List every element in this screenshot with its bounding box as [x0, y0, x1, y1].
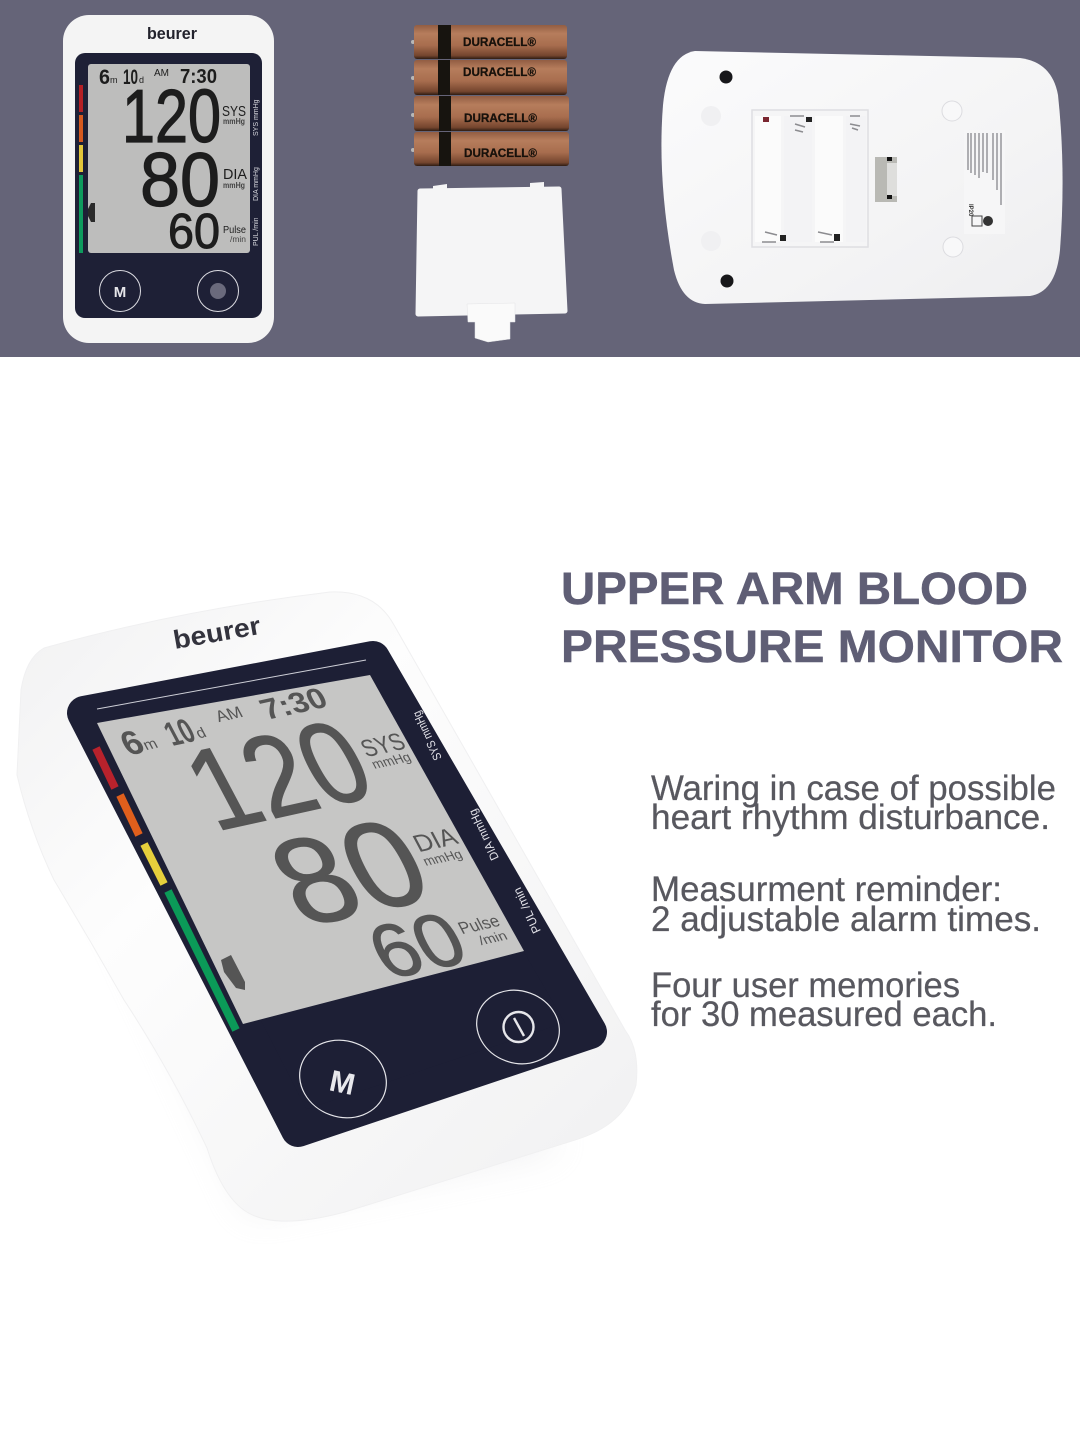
- dark front panel small: [75, 53, 262, 318]
- feature: measurement reminder: Measurment reminder:: [651, 870, 1002, 909]
- brand logo small: beurer: [147, 24, 197, 43]
- monitor back view: [661, 51, 1063, 304]
- AAA batteries: [411, 25, 569, 166]
- LCD readings small: 120: [122, 74, 221, 158]
- LCD readings large: mmHg: [369, 749, 413, 772]
- title: PRESSURE MONITOR: [561, 621, 1063, 672]
- LCD readings small: SYS: [222, 103, 246, 120]
- LCD readings small: /min: [230, 235, 246, 244]
- battery compartment: [752, 110, 868, 247]
- LCD readings small: mmHg: [223, 181, 245, 190]
- LCD readings small: d: [139, 75, 144, 85]
- power button small: [198, 270, 238, 312]
- LCD readings large: [113, 670, 526, 1023]
- LCD readings small: [99, 66, 247, 259]
- title: [561, 563, 1063, 672]
- battery 3: [411, 96, 569, 131]
- scale marker large: [221, 955, 245, 990]
- LCD screen large: [97, 675, 524, 1024]
- panel side labels small: DIA mmHg: [253, 167, 260, 201]
- LCD readings large: 6: [113, 723, 151, 763]
- LCD readings large: AM: [211, 702, 246, 726]
- battery 4: [411, 132, 569, 166]
- large monitor shadow: [60, 800, 560, 1215]
- top band background: [0, 0, 1080, 357]
- panel side labels small: PUL /min: [253, 217, 260, 246]
- power button large: [466, 979, 570, 1075]
- panel side labels small: [253, 99, 260, 246]
- M button small: [100, 270, 140, 312]
- small monitor front view: [63, 15, 274, 343]
- LCD readings large: DIA: [409, 824, 463, 858]
- feature: user memories: for 30 measured each.: [651, 995, 997, 1034]
- LCD readings large: 7:30: [254, 681, 333, 726]
- panel highlight line: [97, 660, 366, 709]
- feature: heart rhythm warning: [651, 769, 1056, 837]
- rating label: IP20: [967, 204, 973, 217]
- feature: user memories: [651, 966, 997, 1034]
- brand logo large: beurer: [171, 610, 263, 655]
- rating label: [964, 130, 1005, 234]
- LCD readings large: Pulse: [455, 911, 503, 938]
- LCD readings small: m: [110, 75, 118, 85]
- battery 1: DURACELL®: [463, 35, 536, 49]
- LCD readings small: 60: [168, 205, 220, 259]
- feature: measurement reminder: [651, 870, 1041, 939]
- LCD readings large: SYS: [356, 729, 410, 762]
- LCD readings small: 80: [140, 138, 220, 223]
- M button small: M: [114, 284, 126, 301]
- dark front panel large: [84, 658, 590, 1130]
- title: UPPER ARM BLOOD: [561, 563, 1028, 614]
- rubber feet: [720, 70, 734, 288]
- feature: heart rhythm warning: Waring in case of possible: [651, 769, 1056, 808]
- LCD readings large: d: [193, 725, 209, 742]
- device body: [17, 592, 637, 1221]
- battery 2: [411, 60, 567, 95]
- LCD readings small: 6: [99, 66, 110, 89]
- LCD readings large: /min: [475, 928, 510, 948]
- panel side labels large: PUL /min: [510, 885, 544, 936]
- battery 4: DURACELL®: [464, 146, 537, 160]
- LCD readings large: 10: [157, 711, 202, 753]
- feature: measurement reminder: 2 adjustable alarm times.: [651, 900, 1041, 939]
- LCD readings small: AM: [154, 68, 169, 79]
- LCD readings small: 7:30: [180, 66, 217, 88]
- colour scale large: [96, 748, 236, 1030]
- scale marker small: [88, 203, 95, 222]
- LCD readings large: 80: [247, 793, 452, 952]
- panel side labels large: [410, 709, 544, 936]
- LCD readings small: 10: [123, 66, 138, 89]
- colour scale small: [79, 85, 83, 253]
- M button large: M: [327, 1065, 358, 1102]
- LCD readings small: DIA: [223, 166, 247, 183]
- feature: user memories: Four user memories: [651, 966, 960, 1005]
- screw posts: [701, 101, 963, 257]
- LCD readings large: mmHg: [420, 846, 465, 869]
- LCD readings large: 60: [354, 897, 481, 995]
- LCD screen small: [88, 64, 250, 253]
- battery 3: DURACELL®: [464, 111, 537, 125]
- LCD readings large: 120: [164, 696, 393, 855]
- LCD readings small: Pulse: [223, 224, 246, 236]
- panel side labels large: DIA mmHg: [466, 807, 502, 863]
- panel side labels small: SYS mmHg: [253, 99, 260, 136]
- panel side labels large: SYS mmHg: [410, 709, 445, 763]
- LCD readings large: m: [140, 736, 161, 754]
- M button large: [289, 1028, 397, 1130]
- battery 1: [411, 25, 567, 59]
- LCD readings small: mmHg: [223, 117, 245, 126]
- feature: heart rhythm warning: heart rhythm disturbance.: [651, 798, 1050, 837]
- latch slot: [875, 157, 897, 202]
- battery 2: DURACELL®: [463, 65, 536, 79]
- large monitor front view: [17, 592, 637, 1221]
- battery cover: [418, 182, 565, 342]
